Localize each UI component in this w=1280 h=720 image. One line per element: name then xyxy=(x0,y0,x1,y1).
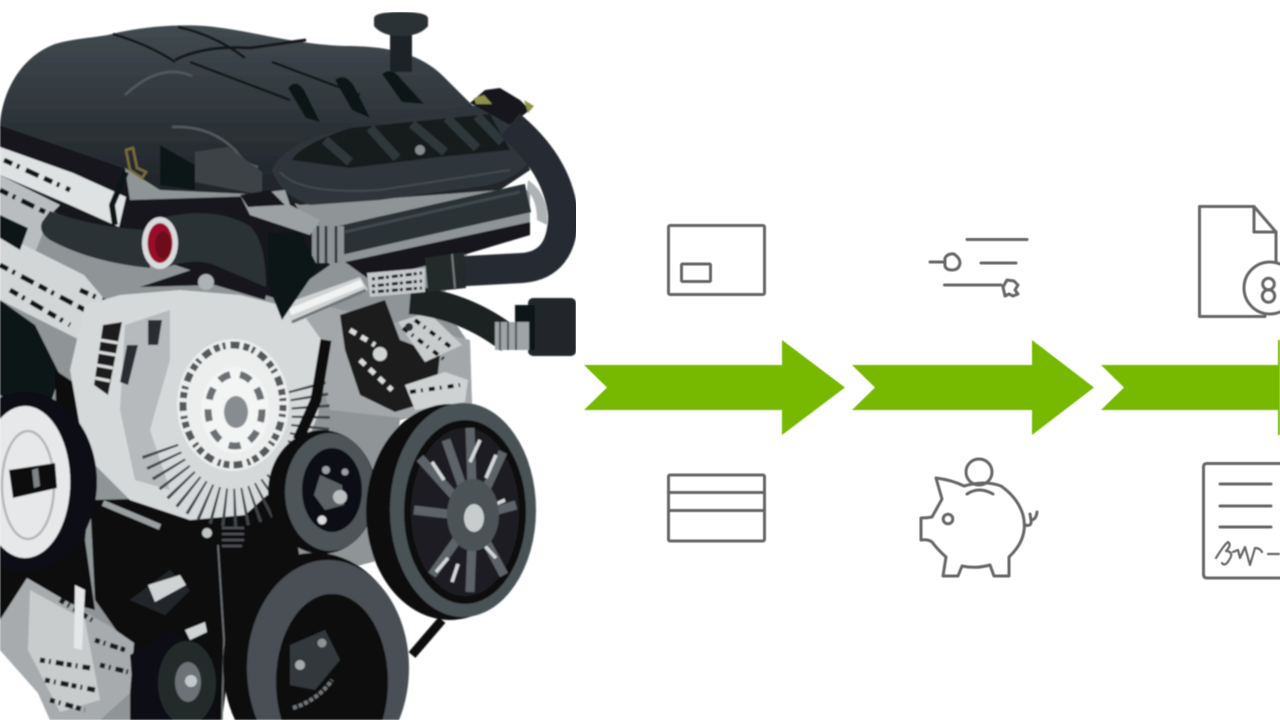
crank pulley xyxy=(223,553,409,720)
central black housing xyxy=(90,495,300,720)
icon: card with chip xyxy=(668,226,764,294)
belt behind alternator xyxy=(298,340,326,440)
icon: signed contract xyxy=(1204,464,1280,578)
bracket bolt xyxy=(202,528,212,538)
mounting bracket black xyxy=(268,232,318,320)
engine illustration xyxy=(0,12,576,720)
silver lower block xyxy=(0,570,207,720)
upper long hose xyxy=(240,180,547,263)
right elbow hose xyxy=(165,213,266,287)
silver intake pipe xyxy=(287,252,466,325)
arrow 1 xyxy=(584,340,845,435)
icon: piggy bank xyxy=(921,459,1037,576)
bolt xyxy=(198,274,214,290)
alternator xyxy=(70,290,325,520)
drive belt xyxy=(412,620,442,655)
lower right hose xyxy=(410,300,510,340)
throttle actuator xyxy=(495,298,576,356)
icon: locked document xyxy=(1200,206,1280,316)
left timing column, dark xyxy=(0,370,100,620)
oil filler cap xyxy=(374,12,428,72)
black strap xyxy=(112,172,126,225)
runner frame xyxy=(272,88,534,205)
green process arrows xyxy=(584,340,1280,435)
ridged bracket xyxy=(222,528,244,546)
large spoked pulley xyxy=(366,403,536,620)
icon: card with stripes xyxy=(668,475,764,541)
intake manifold cover xyxy=(0,25,530,205)
gold clip xyxy=(126,148,146,178)
right outer pipe xyxy=(430,125,563,273)
left white pulley xyxy=(0,392,97,572)
bracket under elbow xyxy=(140,262,268,300)
small lower pulley xyxy=(130,630,216,720)
icon: sliders xyxy=(930,240,1027,296)
silver rod xyxy=(103,503,160,527)
arrow 2 xyxy=(852,340,1094,435)
vertical belt strip xyxy=(218,545,224,720)
left hose xyxy=(41,211,150,268)
alternator cooling fins xyxy=(160,380,311,508)
engine block backing xyxy=(0,125,530,720)
small idler pulley xyxy=(268,430,376,554)
arrow 3 xyxy=(1101,340,1280,435)
line icons xyxy=(668,206,1280,578)
hose end, red xyxy=(142,217,178,269)
